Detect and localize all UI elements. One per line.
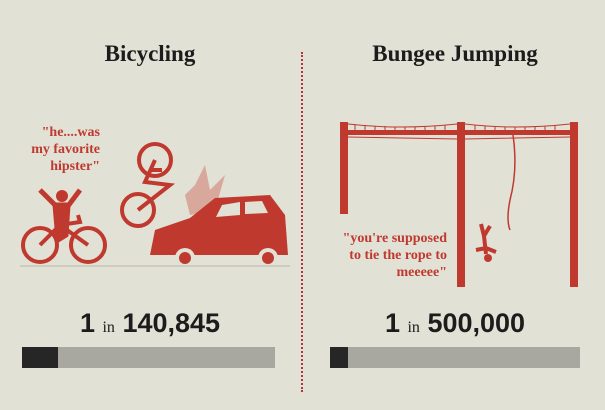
quote: rope <box>343 231 447 280</box>
title: Bungee Jumping: Bungee Jumping <box>372 41 538 66</box>
quote: hipster <box>31 125 100 174</box>
quote: rope: "you're supposed <box>343 231 447 246</box>
bar: bicycling <box>22 347 275 368</box>
illustration: bridge <box>340 122 578 287</box>
bar: bungee <box>330 347 580 368</box>
title: Bicycling: Bicycling <box>105 41 195 66</box>
stat: bungee: 1 in 500,000 <box>385 308 525 338</box>
quote: rope: to tie the rope to <box>349 248 447 263</box>
quote: hipster: "he....was <box>42 125 100 140</box>
illustration: bicycle crash <box>20 142 290 266</box>
divider <box>301 52 303 392</box>
quote: hipster: my favorite <box>31 142 100 157</box>
quote: hipster: hipster" <box>50 159 100 174</box>
stat: bicycling: 1 in 140,845 <box>80 308 220 338</box>
quote: rope: meeeee" <box>396 265 447 280</box>
